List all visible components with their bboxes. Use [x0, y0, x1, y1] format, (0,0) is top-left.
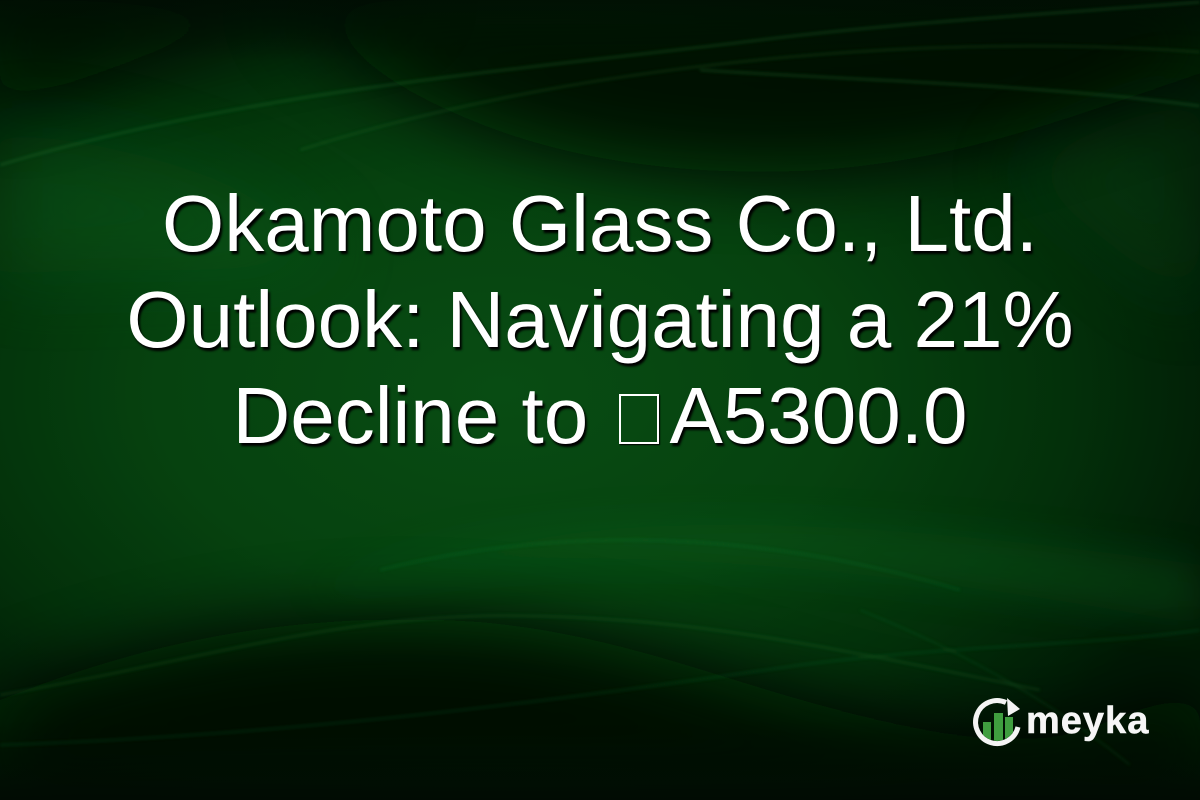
title: Okamoto Glass Co., Ltd. — [162, 179, 1038, 268]
logo: meyka — [973, 698, 1149, 746]
title — [126, 179, 1074, 460]
title: Decline to A5300.0 — [232, 371, 968, 460]
icon: ring with bars and arrow — [976, 698, 1020, 744]
wordmark: meyka — [1026, 700, 1149, 742]
title: Outlook: Navigating a 21% — [126, 275, 1074, 364]
